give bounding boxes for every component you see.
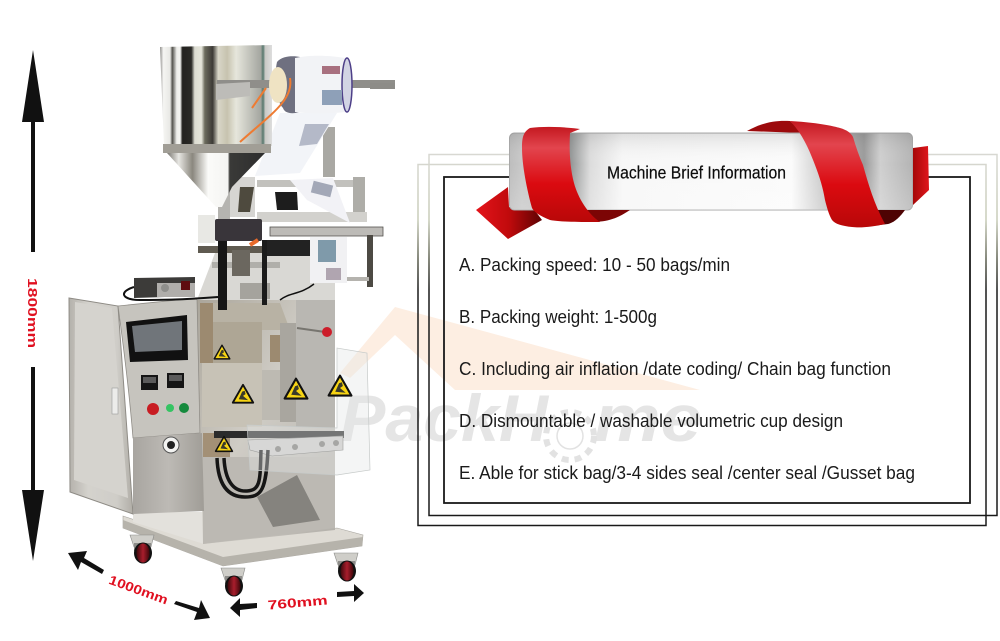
ribbon right band — [790, 121, 885, 227]
upward arrow — [22, 50, 44, 252]
watermark wordmark: PackH — [340, 381, 549, 455]
ribbon right tail — [913, 146, 929, 205]
vented lower box — [133, 512, 204, 544]
dimension: height 1800mm — [22, 50, 44, 561]
spec A: A. Packing speed: 10 - 50 bags/min — [459, 255, 730, 275]
watermark wordmark — [340, 381, 702, 455]
dimension: width 760mm — [230, 584, 364, 617]
hopper — [160, 45, 272, 207]
arrow toward front — [174, 600, 210, 620]
spec C: C. Including air inflation /date coding/ Chain bag function — [459, 359, 891, 379]
arrow toward back — [68, 551, 104, 574]
controller box — [124, 277, 218, 300]
ribbon right band shadow — [872, 210, 905, 226]
lever with red ball — [297, 327, 332, 337]
ribbon left band — [522, 127, 600, 222]
ribbon left band shadow — [575, 210, 630, 222]
downward arrow — [22, 367, 44, 561]
discharge chute — [257, 475, 320, 527]
arrow left — [230, 598, 257, 617]
length label: 1000mm — [107, 572, 170, 607]
seal jaws — [214, 431, 344, 456]
black hoses — [217, 450, 268, 497]
ribbon banner — [476, 121, 929, 239]
watermark: PackHome logo — [340, 307, 702, 460]
film roll and axle — [216, 56, 395, 142]
banner plate — [510, 133, 912, 210]
clear safety guard — [247, 348, 370, 475]
control panel — [118, 298, 204, 514]
panel: machine information frames — [418, 154, 997, 526]
text block: machine specifications — [459, 255, 915, 483]
door latch — [112, 388, 118, 414]
arrow right — [337, 584, 364, 602]
height label: 1800mm — [25, 278, 40, 348]
spec D: D. Dismountable / washable volumetric cup design — [459, 411, 843, 431]
packing machine — [69, 45, 395, 596]
spec E: E. Able for stick bag/3-4 sides seal /center seal /Gusset bag — [459, 463, 915, 483]
machine base and casters — [123, 516, 363, 596]
spec B: B. Packing weight: 1-500g — [459, 307, 657, 327]
film web — [255, 113, 350, 283]
central column and upper frame — [197, 127, 367, 310]
touch screen — [126, 315, 188, 362]
ribbon back piece — [747, 121, 803, 133]
watermark gear — [546, 412, 594, 460]
watermark roof — [340, 307, 700, 390]
banner title: Machine Brief Information — [607, 162, 786, 182]
temperature meters — [141, 373, 184, 390]
dimension: length 1000mm — [68, 551, 210, 620]
left cabinet door — [69, 298, 133, 514]
orange film strap — [240, 78, 290, 142]
width label: 760mm — [267, 592, 328, 613]
selector knob — [163, 437, 179, 453]
ribbon left tail — [476, 187, 542, 239]
control buttons — [147, 403, 189, 415]
film crossbar — [270, 227, 383, 287]
watermark wordmark: me — [594, 381, 702, 455]
main machine body — [197, 298, 335, 544]
warning icons — [214, 345, 351, 451]
